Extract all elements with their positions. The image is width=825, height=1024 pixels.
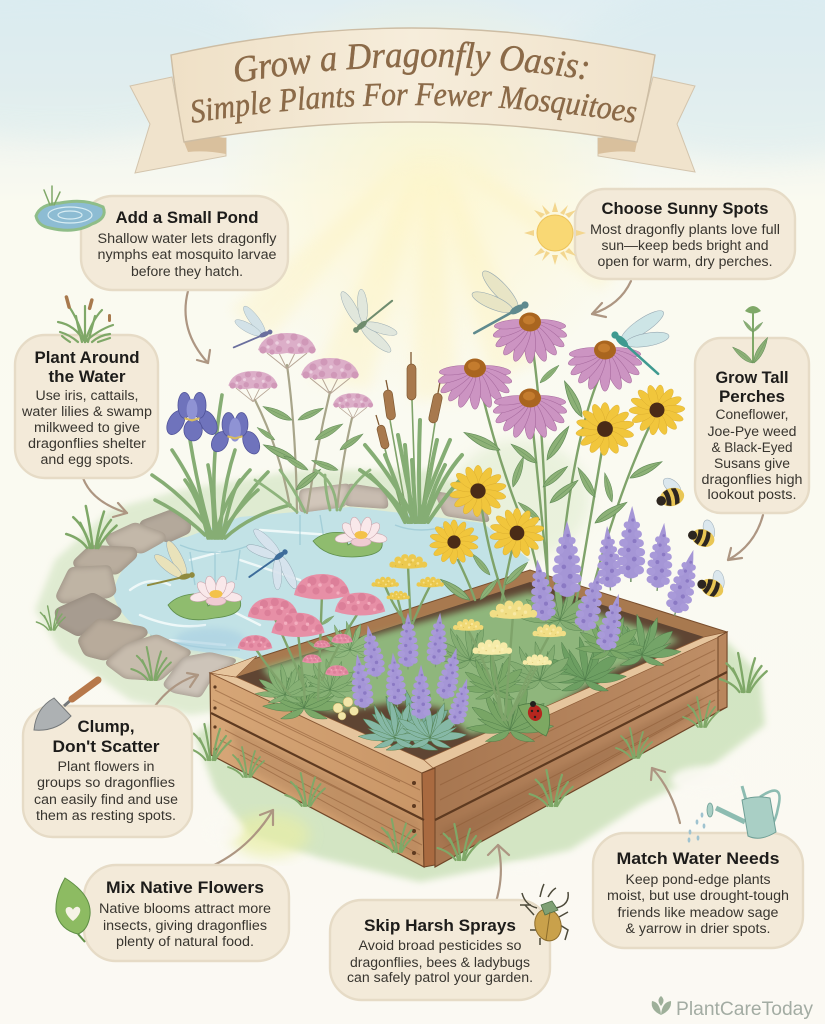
- body text: Coneflower,: [716, 407, 788, 422]
- pink sedum: [238, 574, 385, 700]
- body text: [607, 872, 789, 936]
- bed corner posts: [422, 768, 435, 867]
- body text: Most dragonfly plants love full: [590, 222, 780, 237]
- body text: water lilies & swamp: [21, 404, 152, 419]
- pond water: [113, 507, 530, 665]
- body text: & yarrow in drier spots.: [626, 921, 770, 936]
- joe-pye stems: [255, 365, 352, 513]
- small cream flowers: [333, 697, 358, 720]
- dragonfly: gold over pond: [139, 535, 195, 588]
- body text: Avoid broad pesticides so: [358, 938, 522, 953]
- body text: Plant flowers in: [58, 759, 154, 774]
- body text: nymphs eat mosquito larvae: [98, 247, 276, 262]
- right face shading: [440, 695, 700, 850]
- body text: & Black-Eyed: [712, 440, 792, 455]
- body text: [21, 388, 152, 467]
- arrow: pond: [186, 291, 210, 363]
- bed left face: [210, 673, 424, 867]
- callout: grow tall perches: [695, 338, 809, 513]
- body text: friends like meadow sage: [618, 905, 778, 920]
- body text: [98, 231, 277, 279]
- heading: Clump,: [78, 718, 134, 736]
- heading: Plant Around: [34, 349, 140, 367]
- bed soil: [236, 582, 704, 760]
- heading: Don't Scatter: [52, 738, 160, 756]
- body text: dragonflies shelter: [28, 436, 147, 451]
- bed screws: [213, 685, 416, 855]
- body text: and egg spots.: [40, 452, 134, 467]
- ribbon left tail: [130, 77, 226, 173]
- callout: match water needs: [593, 833, 803, 948]
- body text: Native blooms attract more: [99, 901, 271, 916]
- body text: moist, but use drought-tough: [607, 888, 789, 903]
- body text: plenty of natural food.: [116, 934, 254, 949]
- green foliage fill: [262, 592, 680, 735]
- bed back rim: [210, 570, 727, 768]
- dragonfly: purple: [220, 299, 273, 350]
- pond stones: [55, 484, 490, 697]
- joe-pye base blades: [255, 470, 370, 512]
- body text: open for warm, dry perches.: [598, 254, 772, 269]
- body text: lookout posts.: [708, 487, 796, 502]
- dragonfly: teal on coneflower: [449, 258, 530, 336]
- raised wooden bed: [210, 570, 727, 867]
- callout: add a small pond: [81, 196, 288, 290]
- body text: dragonflies high: [702, 472, 802, 487]
- grass wash: [35, 440, 765, 882]
- cattail blades: [360, 420, 462, 522]
- icon: trowel: [34, 680, 98, 730]
- arrow: sunny: [592, 281, 631, 317]
- watermark: [652, 996, 813, 1020]
- icon: beetle: [520, 884, 568, 945]
- water highlights: [130, 530, 330, 645]
- title text: [192, 41, 637, 124]
- body text: [702, 407, 802, 502]
- body text: Susans give: [714, 456, 790, 471]
- joe-pye leaves: [256, 404, 365, 492]
- heading: Choose Sunny Spots: [602, 200, 768, 218]
- arrow: skip sprays: [488, 845, 509, 905]
- icon: small pond: [36, 186, 104, 230]
- arrow: plant around water: [83, 478, 127, 517]
- dragonfly: blue over pond: [228, 520, 308, 607]
- coneflowers: [436, 312, 644, 439]
- arrow: mix native: [212, 810, 273, 866]
- foliage in bed: [255, 579, 681, 742]
- pond: [113, 507, 530, 665]
- bee one: [651, 472, 687, 510]
- iris plant: [152, 392, 290, 538]
- front lavender with silver foliage: [347, 612, 476, 750]
- arrow: clump: [147, 673, 198, 719]
- heading: Grow Tall: [716, 369, 788, 387]
- heading: [716, 369, 788, 406]
- body text: groups so dragonflies: [37, 775, 175, 790]
- yellow yarrow: [372, 554, 444, 650]
- icon: reeds: [58, 295, 113, 342]
- body text: sun—keep beds bright and: [602, 238, 768, 253]
- left face shading: [230, 725, 422, 862]
- coneflower and black-eyed susan stems: [438, 330, 664, 610]
- iris flower two: [208, 412, 263, 457]
- board seams: [211, 672, 727, 820]
- cattails: [360, 352, 462, 522]
- title ribbon: [129, 27, 696, 174]
- dragonfly: teal right: [610, 295, 692, 376]
- body text: can safely patrol your garden.: [347, 970, 533, 985]
- ribbon right tail: [598, 77, 695, 172]
- ribbon band: [171, 28, 655, 142]
- body text: can easily find and use: [34, 792, 178, 807]
- body text: them as resting spots.: [36, 808, 176, 823]
- body text: Joe-Pye weed: [708, 424, 796, 439]
- icon: leaf with heart: [56, 878, 90, 942]
- body text: [34, 759, 178, 823]
- icon: watering can: [688, 786, 780, 843]
- callout: clump don't scatter: [23, 706, 192, 837]
- stem leaves: [438, 363, 664, 603]
- heading: the Water: [48, 368, 126, 386]
- bed right face: [433, 632, 727, 867]
- heading: Mix Native Flowers: [106, 879, 264, 897]
- callout: plant around the water: [15, 335, 158, 478]
- ladybug on leaf: [518, 701, 550, 736]
- icon: sun: [524, 202, 586, 265]
- iris flower one: [163, 392, 221, 441]
- callout: choose sunny spots: [575, 189, 795, 279]
- callout: skip harsh sprays: [330, 900, 550, 1000]
- cream yarrow: [453, 601, 566, 720]
- heading: Perches: [719, 388, 785, 406]
- iris blades: [152, 395, 290, 538]
- title text: Simple Plants For Fewer Mosquitoes: [192, 83, 637, 124]
- body text: [347, 938, 533, 985]
- joe-pye flower heads: [228, 333, 373, 418]
- lily pad right: [313, 516, 388, 557]
- lily pad left: [168, 575, 243, 620]
- bed rim front strips: [210, 632, 727, 773]
- body text: [590, 222, 780, 269]
- dragonfly: green: [329, 270, 417, 363]
- body text: insects, giving dragonflies: [103, 918, 267, 933]
- tall lavender: [525, 506, 705, 655]
- grass tufts by stones: [36, 506, 171, 680]
- callout: mix native flowers: [84, 865, 289, 961]
- body text: dragonflies, bees & ladybugs: [350, 955, 530, 970]
- black-eyed susans: [429, 381, 689, 564]
- icon: sprout: [731, 306, 770, 365]
- body text: [99, 901, 271, 949]
- heading: Add a Small Pond: [116, 209, 258, 227]
- heading: Skip Harsh Sprays: [364, 917, 516, 935]
- grass tufts around bed: [188, 653, 767, 860]
- bee three: [695, 562, 733, 601]
- body text: before they hatch.: [131, 264, 243, 279]
- title text: Grow a Dragonfly Oasis:: [234, 41, 588, 82]
- watermark icon: [652, 996, 671, 1015]
- body text: milkweed to give: [34, 420, 140, 435]
- bee two: [686, 513, 722, 550]
- watermark text: PlantCareToday: [676, 999, 813, 1020]
- body text: Keep pond-edge plants: [626, 872, 771, 887]
- arrow: perches: [728, 515, 763, 560]
- joe-pye weed: [228, 333, 373, 513]
- cattail stems: [385, 400, 435, 522]
- arrow: water needs: [651, 768, 680, 823]
- cattail spikes: [376, 352, 443, 450]
- body text: Use iris, cattails,: [36, 388, 138, 403]
- heading: Match Water Needs: [616, 850, 780, 868]
- heading: [52, 718, 160, 756]
- heading: [34, 349, 140, 386]
- body text: Shallow water lets dragonfly: [98, 231, 277, 246]
